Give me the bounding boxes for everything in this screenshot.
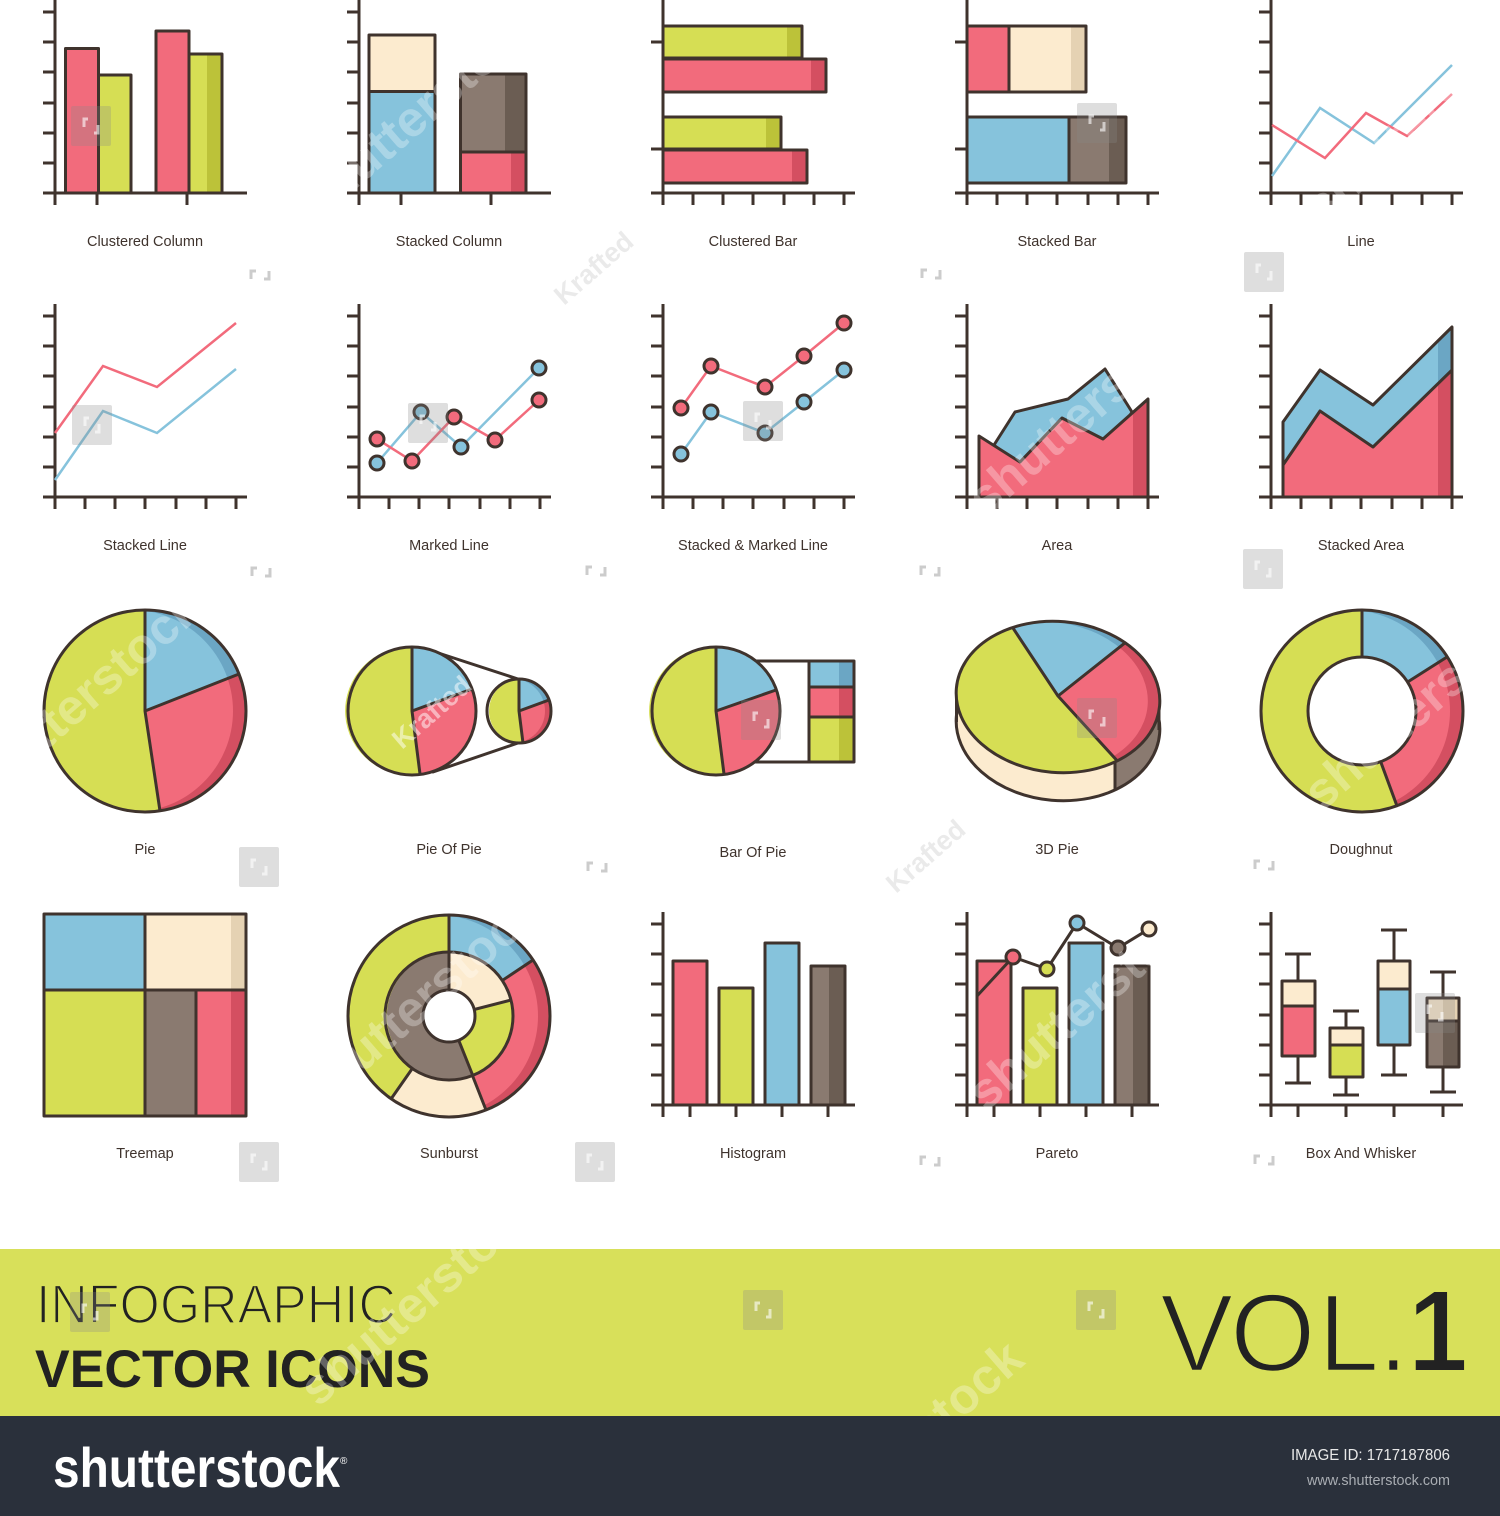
icon: stacked bar [955,0,1159,205]
label: Stacked Area: Stacked Area [1318,538,1405,554]
watermarks: shutterstock [956,881,1220,1120]
watermarks: shutterstock [956,287,1220,526]
label: Clustered Column: Clustered Column [87,234,203,250]
watermarks: Krafted [548,226,639,311]
image id: IMAGE ID: 1717187806 [1291,1447,1450,1464]
label: Bar Of Pie: Bar Of Pie [720,845,786,861]
label: Stacked Line: Stacked Line [103,538,187,554]
watermarks: Krafted [880,814,971,899]
label: Stacked Column: Stacked Column [396,234,502,250]
banner background [0,1249,1500,1416]
label: Pie: Pie [135,842,155,858]
label: Box And Whisker: Box And Whisker [1306,1146,1416,1162]
icon: box and whisker [1259,912,1463,1117]
heading: VOL.1: VOL. [1160,1272,1409,1395]
watermarks: Krafted [386,670,477,755]
label: Marked Line: Marked Line [409,538,489,554]
heading: VECTOR ICONS: VECTOR ICONS [35,1340,430,1399]
icon: clustered column [43,0,247,205]
label: Pie Of Pie: Pie Of Pie [416,842,482,858]
label: Treemap: Treemap [116,1146,174,1162]
icon: 3D pie [954,620,1162,802]
icon: bar of pie [649,647,854,775]
logo: shutterstock: shutterstock [53,1436,341,1499]
label: Pareto: Pareto [1036,1146,1078,1162]
icon: pie of pie [345,647,551,775]
icon: treemap [44,914,246,1116]
icon: stacked line [43,304,247,509]
icon: marked line [347,304,551,509]
icon: stacked column [347,0,551,205]
label: Sunburst: Sunburst [420,1146,478,1162]
label: Line: Line [1347,234,1375,250]
footer bar [0,1416,1500,1516]
icon: pie chart [44,610,246,812]
icon: line chart [1259,0,1463,205]
logo: shutterstock: ® [340,1456,348,1467]
heading: VOL.1: 1 [1408,1266,1468,1396]
watermarks: shutterstock [288,1177,552,1416]
icon: clustered bar [651,0,855,205]
heading: INFOGRAPHIC: INFOGRAPHIC [36,1273,396,1335]
label: Histogram: Histogram [720,1146,786,1162]
label: Stacked & Marked Line: Stacked & Marked Line [678,538,828,554]
icon: area chart [955,304,1159,509]
label: Stacked Bar: Stacked Bar [1018,234,1097,250]
label: 3D Pie: 3D Pie [1035,842,1079,858]
label: Clustered Bar: Clustered Bar [709,234,797,250]
label: Doughnut: Doughnut [1330,842,1392,858]
label: Area: Area [1042,538,1073,554]
icon: stacked area chart [1259,304,1463,509]
icon: doughnut [1261,610,1463,812]
website url: www.shutterstock.com [1306,1472,1450,1489]
icon: sunburst [348,915,550,1117]
watermarks: shutterstock [288,881,552,1120]
icon: pareto [955,912,1159,1117]
icon: histogram [651,912,855,1117]
icon: stacked and marked line [651,304,855,509]
